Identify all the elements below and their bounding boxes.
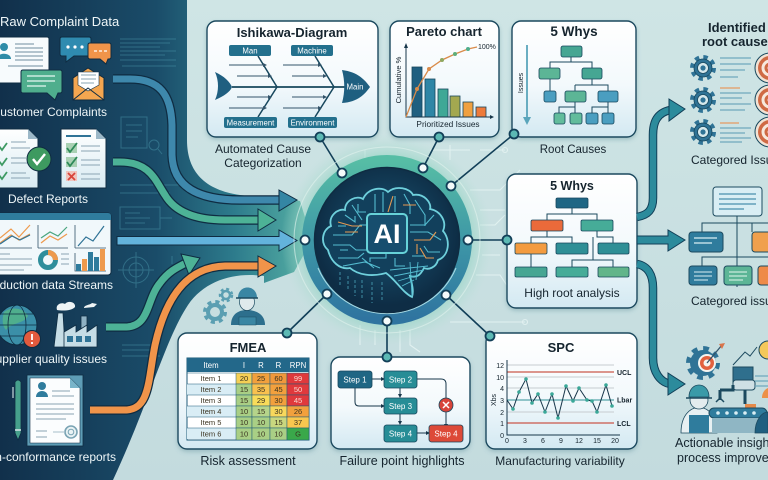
control chart: 4 [500, 386, 504, 393]
FMEA table: Item 3 [201, 396, 221, 405]
ring nodes [300, 164, 472, 326]
outer rings [294, 147, 480, 333]
AI core [294, 147, 480, 333]
pareto bars and curve: 100% [478, 44, 496, 51]
decorative circuit traces [360, 145, 528, 352]
heading: Pareto chart: Pareto chart [406, 24, 483, 39]
FMEA table: 30 [274, 396, 283, 405]
FMEA table: Item 6 [201, 430, 221, 438]
FMEA table: 60 [274, 374, 283, 383]
fishbone chart [215, 45, 370, 128]
AI chip [367, 214, 407, 253]
FMEA table: 35 [257, 385, 265, 394]
ring highlight [318, 268, 456, 314]
fishbone chart: Environment [291, 118, 335, 128]
heading: FMEA: FMEA [230, 340, 267, 355]
brain orange traces [338, 196, 436, 258]
FMEA table: 15 [240, 396, 248, 405]
icon: factory [54, 302, 97, 347]
FMEA table: R [258, 361, 264, 370]
control chart: 6 [541, 438, 545, 445]
FMEA table: R [276, 361, 282, 370]
icon: robot machine [709, 341, 768, 433]
FMEA table: 15 [240, 385, 248, 394]
panel: dark left data background [0, 0, 312, 480]
panel: Ishikawa diagram [207, 21, 378, 137]
connector lines to AI core [287, 134, 514, 357]
FMEA table: 45 [274, 385, 283, 394]
step labels: Step 4 [389, 430, 413, 438]
caption: high root analysis: High root analysis [524, 286, 620, 300]
step labels: Step 3 [389, 402, 413, 411]
FMEA table: 37 [294, 418, 302, 427]
icon: envelope [73, 68, 104, 100]
FMEA table: 25 [257, 374, 265, 383]
arrow: to actionable insights [637, 264, 685, 395]
panel: FMEA [178, 333, 317, 449]
icon: customer complaint document [0, 37, 49, 83]
panel: failure point flow [331, 357, 470, 449]
control chart [491, 360, 632, 445]
icon row: gears and targets [692, 53, 768, 147]
caption: failure point highlights: Failure point highlights [339, 454, 465, 468]
FMEA table: 26 [294, 407, 302, 416]
FMEA table: Item [203, 361, 219, 370]
dark core [314, 168, 460, 312]
icon: green speech bubble [21, 70, 62, 100]
caption: automated cause categorization: Automated Cause [215, 142, 311, 156]
icon: failure marker [439, 398, 453, 412]
step labels: Step 2 [389, 376, 413, 384]
control chart: 15 [593, 438, 601, 445]
fishbone chart: Man [242, 46, 258, 56]
FMEA table: 10 [240, 430, 248, 438]
heading: raw complaint data: Raw Complaint Data [0, 14, 120, 29]
caption: root causes: Root Causes [540, 144, 606, 156]
icon: blue speech bubble [60, 37, 91, 62]
glow around AI core [281, 134, 493, 346]
step labels: Step 1 [343, 376, 367, 384]
FMEA table: G [295, 430, 301, 438]
heading: 5 Whys: 5 Whys [550, 179, 594, 193]
FMEA table: Item 2 [201, 385, 221, 394]
panel connector nodes [282, 130, 518, 362]
FMEA table: 15 [257, 407, 265, 416]
fishbone chart: Measurement [227, 118, 275, 128]
why tree [539, 46, 618, 124]
icon: worker left [681, 385, 717, 433]
brain outline [323, 188, 448, 297]
icon: non-conformance document [27, 375, 83, 446]
FMEA table: 99 [294, 374, 302, 383]
heading: identified root causes: Identified [708, 20, 766, 35]
arrow: to categorized issues [637, 230, 685, 251]
control chart: 0 [500, 433, 504, 440]
control chart: 3 [500, 398, 504, 405]
icon: defect report with check [0, 129, 51, 188]
icon: orange speech bubble [88, 43, 111, 64]
arrow: green supplier stream [106, 254, 200, 327]
control chart: UCL [617, 370, 632, 377]
control chart: 1 [500, 421, 504, 428]
control chart: LCL [617, 421, 631, 428]
control chart: 3 [523, 438, 527, 445]
FMEA table [187, 358, 309, 440]
blue ring [308, 161, 466, 319]
control chart: 0 [505, 438, 509, 445]
FMEA table: 10 [240, 407, 248, 416]
issues arrow: Issues [518, 72, 525, 93]
pareto bars and curve: Prioritized Issues [416, 119, 480, 129]
panel: SPC chart [486, 333, 637, 449]
pareto bars and curve [394, 43, 496, 129]
caption: risk assessment: Risk assessment [200, 454, 296, 468]
AI label: AI [374, 219, 400, 249]
FMEA table: 10 [257, 418, 265, 427]
icon: defect report with cross [61, 129, 106, 188]
arrow: blue complaint stream [113, 79, 297, 211]
FMEA table: RPN [290, 361, 306, 370]
control chart: 12 [496, 363, 504, 370]
arrow: green defect stream [113, 162, 276, 231]
icon: gear with target [689, 343, 725, 377]
control chart: 2 [500, 410, 504, 417]
control chart: Lbar [617, 398, 632, 404]
icon: worker right [755, 388, 768, 433]
arrow: light blue production stream [117, 230, 297, 251]
flow connectors [355, 379, 446, 433]
panel: Pareto chart [390, 21, 499, 137]
step labels [343, 376, 458, 438]
FMEA table: Item 5 [201, 418, 221, 427]
brain cerebellum hatching [390, 262, 428, 296]
FMEA table: 50 [294, 385, 302, 394]
diagram: category org chart [689, 187, 768, 287]
arrow: to identified root causes [637, 99, 685, 217]
FMEA table: 45 [294, 396, 302, 405]
FMEA table: 15 [274, 418, 283, 427]
control chart: 12 [575, 438, 583, 445]
FMEA table: Item 4 [201, 407, 221, 416]
icon: pen [13, 380, 21, 440]
step boxes [338, 371, 463, 442]
heading: Ishikawa-Diagram: Ishikawa-Diagram [237, 25, 347, 40]
panel: 5 Whys top [512, 21, 636, 137]
FMEA table: Item 1 [201, 374, 221, 383]
icon: globe with alert [0, 305, 40, 348]
decorative faint tech glyphs [118, 39, 180, 356]
icon: production dashboard [0, 213, 111, 275]
label: defect reports: Defect Reports [8, 192, 88, 206]
control chart: 20 [611, 438, 619, 445]
icon: maintenance gears [206, 290, 232, 322]
FMEA table: 10 [274, 430, 283, 438]
heading: 5 Whys: 5 Whys [550, 24, 598, 39]
control chart: 10 [496, 375, 504, 382]
flow arrowheads [381, 377, 448, 435]
fishbone chart: Main [347, 82, 363, 92]
analysis tree [515, 198, 629, 277]
fishbone chart: Machine [297, 46, 327, 56]
FMEA table: 30 [274, 407, 283, 416]
heading: SPC: SPC [548, 340, 575, 355]
FMEA table: 29 [257, 396, 265, 405]
step labels: Step 4 [434, 430, 458, 438]
FMEA table: 10 [257, 430, 265, 438]
FMEA table: 20 [240, 374, 248, 383]
panel: high root analysis [507, 174, 637, 308]
FMEA table: 10 [240, 418, 248, 427]
control chart: Xbs [491, 393, 498, 406]
icon: engineer [231, 288, 265, 325]
brain circuit traces [333, 192, 441, 268]
caption: manufacturing variability: Manufacturing variability [495, 454, 625, 468]
FMEA table: I [243, 361, 245, 370]
control chart: 9 [559, 438, 563, 445]
caption: automated cause categorization: Categorization [224, 156, 302, 170]
pareto bars and curve: Cumulative % [394, 56, 403, 103]
arrow: orange non-conformance stream [90, 256, 276, 410]
circuit roots [340, 272, 382, 303]
